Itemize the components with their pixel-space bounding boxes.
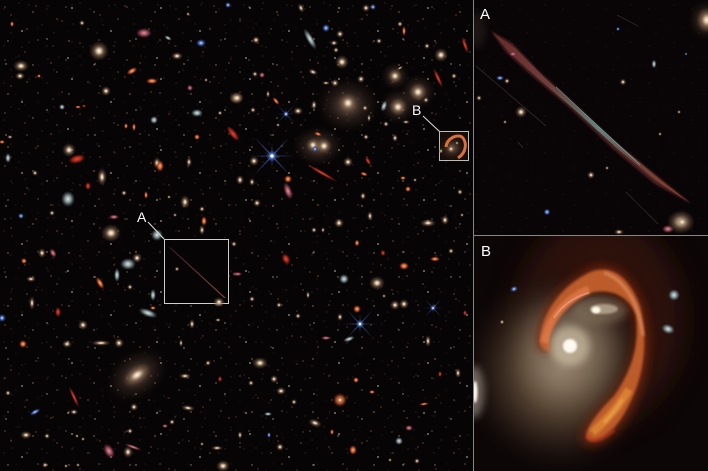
galaxies: lower right: [234, 199, 467, 464]
panel dividers: [473, 0, 708, 471]
galaxies: upper centre cluster: [225, 2, 470, 201]
cluster glow: [110, 65, 432, 398]
galaxies: upper left: [0, 2, 243, 242]
edge-on galaxy streak: [491, 31, 692, 204]
lens halo: [474, 286, 632, 461]
label: A on main image: A: [137, 209, 147, 225]
callout box: A on main image: [148, 222, 228, 307]
fuzzy patch top left: [474, 14, 486, 46]
label: inset B: B: [481, 243, 491, 260]
faint thin streaks: [476, 15, 658, 224]
small galaxies in A: [476, 27, 695, 235]
small companions: [500, 285, 680, 336]
edge galaxy bottom left: [474, 362, 488, 422]
fuzzy galaxy top right: [692, 4, 708, 36]
panel: main deep field: [0, 0, 473, 471]
callout box: B on main image: [423, 116, 468, 161]
label: inset A: A: [480, 6, 490, 23]
lens galaxy cores: [550, 304, 618, 366]
stars: diffraction spikes: [249, 105, 444, 338]
galaxies: lower left: [0, 241, 240, 471]
panel: inset A: [469, 0, 708, 235]
reddish glow around arc: [515, 215, 685, 425]
label: B on main image: B: [412, 102, 421, 118]
lensed arc: [537, 265, 649, 446]
panel: inset B: [474, 236, 702, 470]
